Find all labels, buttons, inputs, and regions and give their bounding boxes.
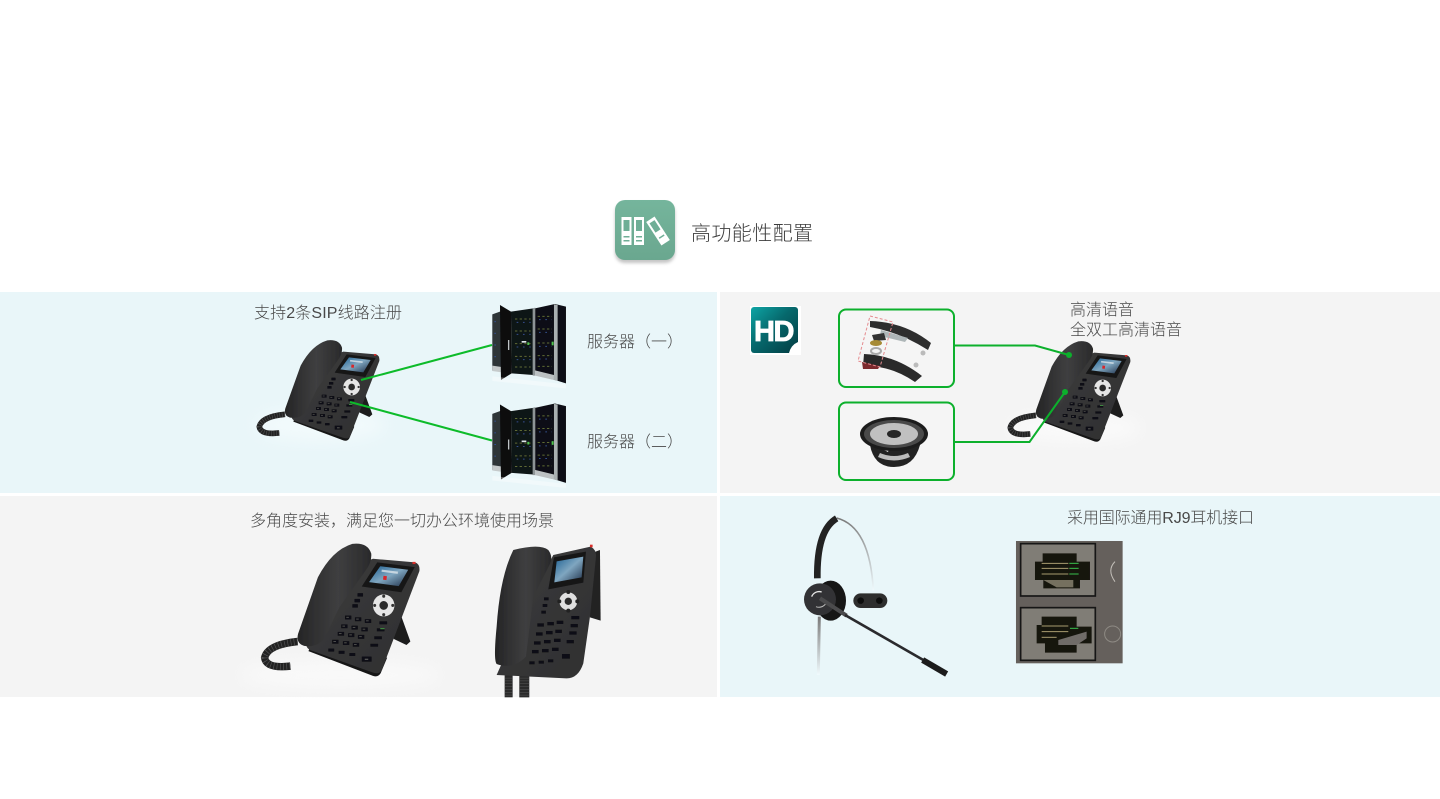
panel: SIP background (0, 292, 717, 493)
phone glow (240, 661, 440, 689)
photo: RJ9 ports (1016, 541, 1123, 663)
headset (804, 518, 947, 675)
panel: RJ9 background (720, 496, 1440, 697)
label: server two: 服务器（二） (587, 433, 683, 451)
panel: multi-angle background (0, 496, 717, 697)
label: server one: 服务器（一） (587, 333, 683, 351)
server two (492, 403, 566, 488)
arrow: line to server one (361, 345, 492, 380)
heading: HD voice: 高清语音 (1070, 301, 1134, 319)
arrow: handset connector (955, 346, 1072, 358)
heading: SIP lines: 支持2条SIP线路注册 (254, 304, 402, 322)
phone glow (255, 409, 385, 441)
phone glow (1010, 414, 1140, 442)
title: 高功能性配置 (691, 222, 813, 245)
box: speaker (839, 402, 954, 480)
heading: multi-angle: 多角度安装，满足您一切办公环境使用场景 (250, 512, 554, 530)
panel: HD voice background (720, 292, 1440, 493)
phone (259, 340, 379, 441)
phone: angled view (265, 544, 420, 676)
phone: wall-mounted view (495, 545, 601, 697)
panel: RJ9 headset port (804, 509, 1254, 675)
icon: HD badge (750, 306, 801, 355)
arrow: line to server two (350, 402, 492, 440)
panel: HD voice (750, 301, 1182, 480)
text: full duplex: 全双工高清语音 (1070, 321, 1182, 339)
section header (615, 200, 813, 263)
server one (492, 304, 566, 388)
box: handset parts (839, 310, 954, 387)
phone (1010, 341, 1130, 442)
heading: RJ9: 采用国际通用RJ9耳机接口 (1067, 509, 1254, 527)
arrow: speaker connector (955, 389, 1068, 442)
icon: binders (615, 200, 675, 263)
panel: multi-angle install (240, 512, 601, 697)
icon: HD badge: HD (754, 316, 793, 348)
panel: SIP registration (254, 304, 683, 488)
